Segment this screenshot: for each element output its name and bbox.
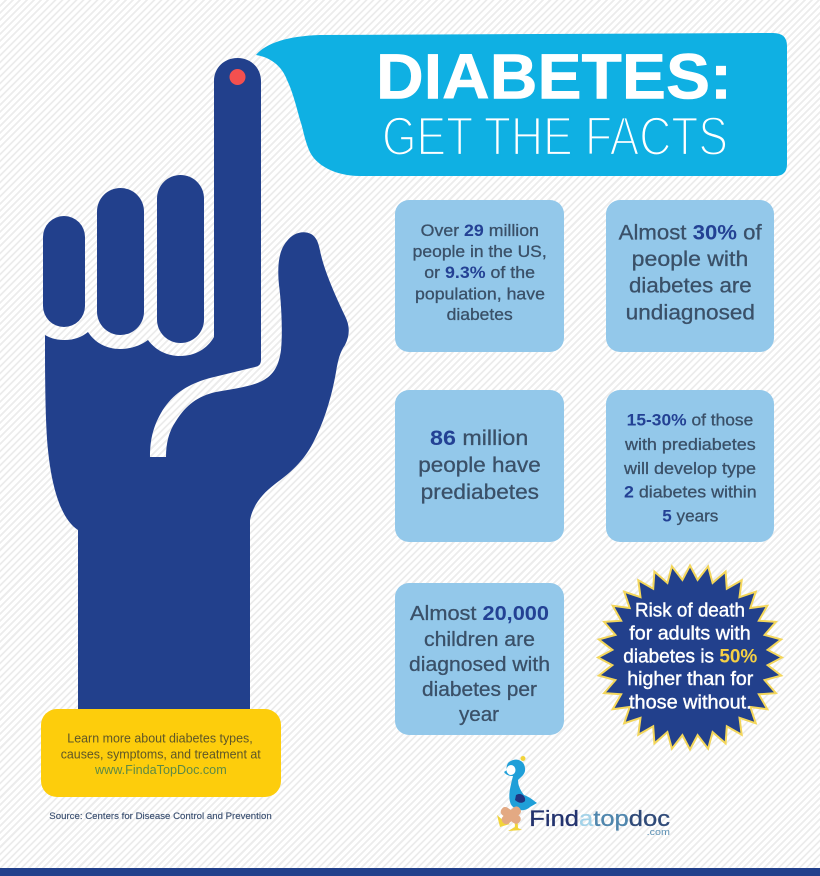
starburst badge xyxy=(598,566,782,750)
starburst callout: risk of death xyxy=(598,566,782,750)
fact card: 30% undiagnosed: people with xyxy=(632,248,748,271)
illustration: hand pointing up xyxy=(43,58,349,710)
fact card: 20,000 children xyxy=(395,583,564,735)
callout: learn more box: www.FindaTopDoc.com xyxy=(94,763,227,777)
fact card: 15-30% develop type 2: with prediabetes xyxy=(624,436,756,454)
logo wordmark: Find atopdoc xyxy=(529,806,670,831)
icon: duck mascot with bandage xyxy=(497,756,537,831)
fact card: 15-30% develop type 2: 15-30% of those xyxy=(627,412,753,430)
fact card: 86 million prediabetes xyxy=(395,390,564,542)
fact card: 30% undiagnosed xyxy=(606,200,774,352)
subtitle: GET THE FACTS: GET THE FACTS xyxy=(382,105,728,167)
title banner xyxy=(256,33,787,176)
fact card: 30% undiagnosed: diabetes are xyxy=(629,275,752,298)
fact card: 86 million prediabetes: prediabetes xyxy=(421,481,539,504)
fact card: 15-30% develop type 2: 2 diabetes within xyxy=(624,484,757,502)
banner speech shape xyxy=(256,33,787,176)
starburst text: higher than for xyxy=(627,669,754,690)
starburst text: for adults with xyxy=(629,623,751,644)
ring finger xyxy=(97,188,144,335)
fact card: 30% undiagnosed: undiagnosed xyxy=(626,301,755,324)
callout: learn more box: Learn more about diabetes types, xyxy=(67,731,253,745)
starburst text: Risk of death xyxy=(635,601,745,622)
fact card: 20,000 children: diabetes per xyxy=(422,679,537,701)
fact card: 20,000 children: year xyxy=(459,704,499,726)
logo .com: .com xyxy=(647,827,670,838)
starburst text: diabetes is 50% xyxy=(623,647,757,668)
fact card: 15-30% develop type 2: will develop type xyxy=(623,460,756,478)
callout: learn more box: causes, symptoms, and treatment at xyxy=(61,747,261,761)
fact card: 29 million: people in the US, xyxy=(413,243,547,261)
fact card: 29 million xyxy=(395,200,564,352)
callout: learn more box xyxy=(41,709,281,797)
fact card: 29 million: or 9.3% of the xyxy=(424,264,535,282)
source note: Source: Centers for Disease Control and Prevention xyxy=(49,811,272,822)
red blood drop on fingertip xyxy=(230,69,246,85)
starburst text: those without. xyxy=(629,692,752,713)
fact card: 29 million: diabetes xyxy=(447,306,513,324)
fact card: 86 million prediabetes: people have xyxy=(418,454,541,477)
pinky finger xyxy=(43,216,85,327)
fact card: 86 million prediabetes: 86 million xyxy=(430,427,528,450)
footer bar xyxy=(0,868,820,876)
fact card: 15-30% develop type 2 xyxy=(606,390,774,542)
fact card: 20,000 children: diagnosed with xyxy=(409,654,550,676)
fact card: 29 million: Over 29 million xyxy=(421,222,539,240)
starburst text xyxy=(623,601,757,713)
fact card: 30% undiagnosed: Almost 30% of xyxy=(619,221,762,244)
fact card: 20,000 children: Almost 20,000 xyxy=(410,603,549,625)
logo: Findatopdoc xyxy=(497,756,670,838)
fact card: 20,000 children: children are xyxy=(424,629,535,651)
middle finger xyxy=(157,175,204,343)
hand palm, index finger and thumb xyxy=(45,58,349,710)
title: DIABETES: DIABETES: xyxy=(376,40,732,112)
fact card: 15-30% develop type 2: 5 years xyxy=(662,508,718,526)
fact card: 29 million: population, have xyxy=(415,286,545,304)
